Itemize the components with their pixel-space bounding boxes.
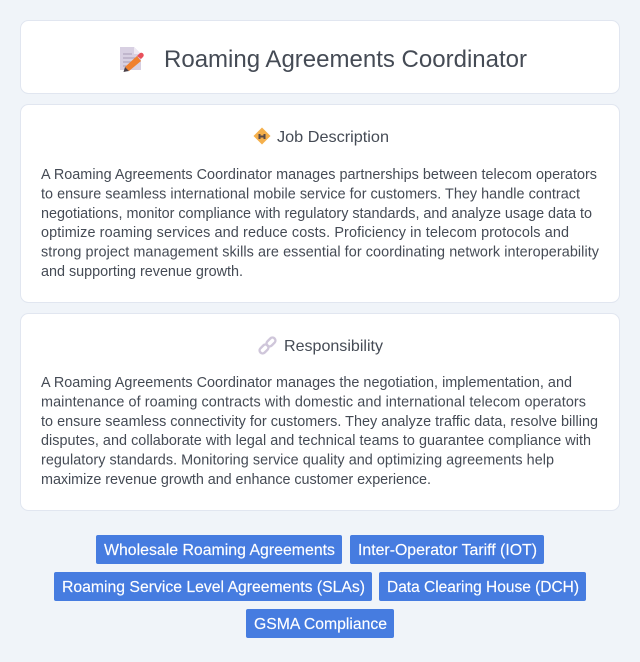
job description text: A Roaming Agreements Coordinator manages partnerships between telecom operators xyxy=(41,167,597,183)
tag: wholesale roaming agreements: Wholesale Roaming Agreements xyxy=(104,542,335,559)
responsibility text: disputes, and collaborate with legal and technical teams to guarantee compliance with xyxy=(41,433,591,449)
job description text xyxy=(41,167,600,280)
tag: data clearing house: Data Clearing House (DCH) xyxy=(387,579,579,596)
tag: wholesale roaming agreements xyxy=(96,535,342,564)
responsibility text: A Roaming Agreements Coordinator manages the negotiation, implementation, and xyxy=(41,375,572,391)
responsibility text: to ensure seamless connectivity for customers. They analyze traffic data, resolve billing xyxy=(41,414,598,430)
responsibility text: maximize revenue growth and enhance customer experience. xyxy=(41,472,431,488)
tag: data clearing house xyxy=(379,572,586,601)
job description text: negotiations, monitor compliance with regulatory standards, and analyze usage data to xyxy=(41,206,592,222)
job description text: optimize roaming services and reduce costs. Proficiency in telecom protocols and xyxy=(41,225,569,241)
icon: diamond sign xyxy=(254,128,270,144)
tag: roaming service level agreements xyxy=(54,572,372,601)
panel: responsibility xyxy=(20,314,620,510)
tag: inter-operator tariff: Inter-Operator Tariff (IOT) xyxy=(358,542,537,559)
icon: link xyxy=(258,336,277,355)
responsibility text: regulatory standards. Monitoring service quality and optimizing agreements help xyxy=(41,453,554,469)
job description text: to ensure seamless international mobile service for customers. They handle contract xyxy=(41,186,580,202)
panel: job description xyxy=(20,104,620,302)
tag: inter-operator tariff xyxy=(350,535,544,564)
tag: roaming service level agreements: Roaming Service Level Agreements (SLAs) xyxy=(62,579,365,596)
responsibility text: maintenance of roaming contracts with domestic and international telecom operators xyxy=(41,394,586,410)
tag: GSMA compliance xyxy=(246,609,394,638)
job description text: strong project management skills are essential for coordinating network interoperability xyxy=(41,245,600,261)
job description text: and supporting revenue growth. xyxy=(41,264,243,280)
responsibility text xyxy=(41,375,598,488)
tag: GSMA compliance: GSMA Compliance xyxy=(254,616,387,633)
job description heading: Job Description xyxy=(277,129,389,146)
title text: Roaming Agreements Coordinator xyxy=(164,46,527,73)
icon: memo with pencil xyxy=(120,47,144,72)
responsibility heading: Responsibility xyxy=(284,338,383,355)
panel: title xyxy=(20,20,620,94)
